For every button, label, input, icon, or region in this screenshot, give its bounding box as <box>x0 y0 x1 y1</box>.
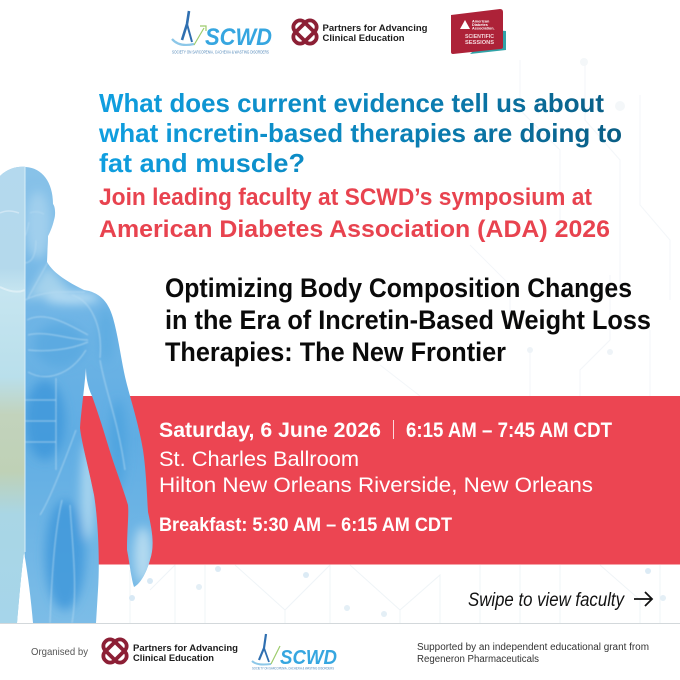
logo: SCWD: SCWD <box>205 24 272 51</box>
fat half of body <box>0 150 25 623</box>
footer logo: SCWD: SCWD <box>280 647 337 669</box>
top logo row <box>172 9 506 54</box>
logo: ADA Scientific Sessions: SCIENTIFIC <box>465 34 494 40</box>
venue room: St. Charles Ballroom <box>159 447 359 471</box>
invitation subheading: American Diabetes Association (ADA) 2026 <box>99 216 610 243</box>
logo: ADA Scientific Sessions: Association. <box>472 26 495 30</box>
grant support statement <box>417 642 649 665</box>
icon: right arrow <box>634 592 652 606</box>
logo: SCWD <box>172 11 272 54</box>
main question heading: What does current evidence tell us about <box>99 88 604 118</box>
footer logo: Partners for Advancing Clinical Education: Clinical Education <box>133 652 214 663</box>
footer logo: SCWD: SOCIETY ON SARCOPENIA, CACHEXIA & WASTING DISORDERS <box>252 666 334 670</box>
logo: Partners for Advancing Clinical Education: Partners for Advancing <box>322 22 428 33</box>
logo: ADA Scientific Sessions: SESSIONS <box>465 40 495 46</box>
separator <box>393 420 394 439</box>
grant support statement: Supported by an independent educational grant from <box>417 642 649 653</box>
grant support statement: Regeneron Pharmaceuticals <box>417 654 539 665</box>
invitation subheading: Join leading faculty at SCWD’s symposium at <box>99 184 592 211</box>
anatomical body figure <box>0 166 153 623</box>
logo: Partners for Advancing Clinical Education: Clinical Education <box>322 32 405 43</box>
logo: Partners for Advancing Clinical Education <box>291 18 428 46</box>
footer logo: SCWD <box>252 634 337 670</box>
symposium title: in the Era of Incretin-Based Weight Loss <box>165 305 651 335</box>
body midline <box>24 167 26 552</box>
footer logo: Partners for Advancing Clinical Education <box>101 637 238 665</box>
event details text <box>159 419 612 536</box>
background circuit pattern <box>129 58 670 623</box>
invitation subheading <box>99 184 610 243</box>
time: 6:15 AM – 7:45 AM CDT <box>406 419 612 442</box>
breakfast time: Breakfast: 5:30 AM – 6:15 AM CDT <box>159 514 452 536</box>
venue hotel: Hilton New Orleans Riverside, New Orleans <box>159 473 593 497</box>
swipe prompt: Swipe to view faculty <box>468 590 625 611</box>
footer <box>0 623 680 670</box>
logo: ADA Scientific Sessions: Diabetes <box>472 23 488 27</box>
footer divider <box>0 623 680 624</box>
event details band <box>78 396 680 564</box>
logo: ADA Scientific Sessions: American <box>472 20 490 24</box>
symposium title <box>165 273 651 367</box>
main question heading <box>98 88 622 178</box>
organised by label: Organised by <box>31 646 89 658</box>
symposium title: Optimizing Body Composition Changes <box>165 273 632 303</box>
footer logo: Partners for Advancing Clinical Education: Partners for Advancing <box>133 642 238 653</box>
muscle half of body <box>0 166 153 623</box>
main question heading: fat and muscle? <box>99 148 305 178</box>
logo: ADA Scientific Sessions <box>451 9 506 54</box>
date: Saturday, 6 June 2026 <box>159 419 381 442</box>
symposium title: Therapies: The New Frontier <box>165 337 506 367</box>
main question heading: what incretin-based therapies are doing to <box>98 118 622 148</box>
logo: SCWD: SOCIETY ON SARCOPENIA, CACHEXIA & WASTING DISORDERS <box>172 50 269 54</box>
